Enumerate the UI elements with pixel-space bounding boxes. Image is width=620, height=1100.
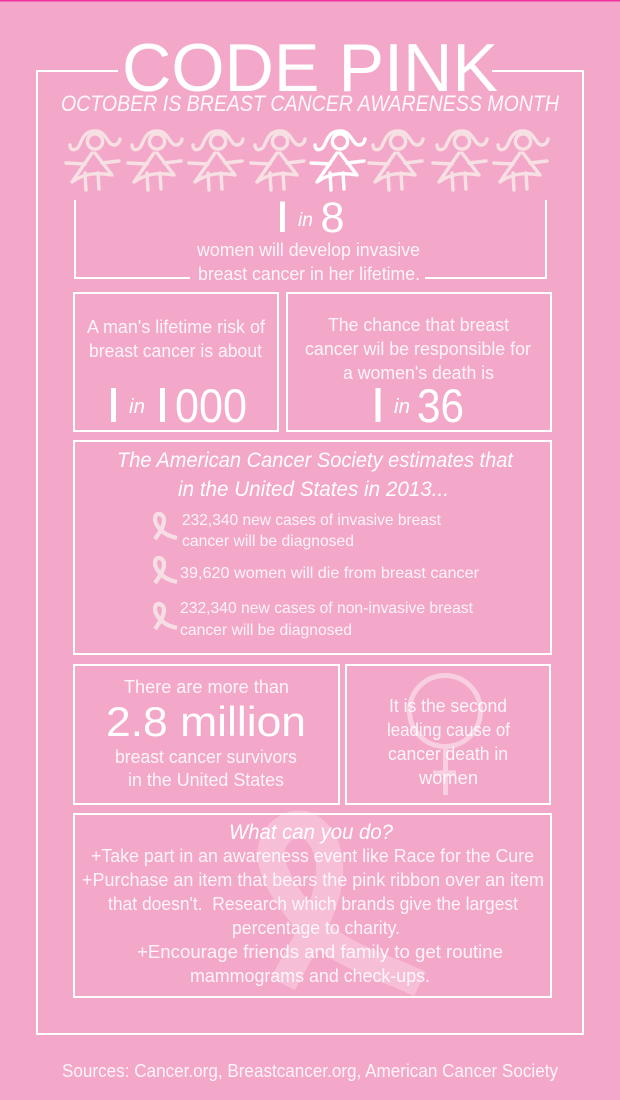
- bullet: deaths: 39,620 women will die from breast cancer: [180, 565, 480, 582]
- panel: man's risk: [74, 293, 278, 432]
- statistic: 1 in 8: [280, 194, 344, 242]
- bullet: non-invasive cases: [180, 600, 474, 639]
- statistic: 2.8 million: 2.8 million: [106, 698, 306, 745]
- statistic: 1 in 36: 1: [376, 379, 380, 432]
- text block: a women's death is: [343, 363, 494, 383]
- text block: There are more than: [124, 677, 289, 697]
- panel: survivors: [74, 665, 339, 804]
- statistic: 1 in 1000: [111, 379, 247, 432]
- panel: American Cancer Society estimates: [74, 441, 551, 654]
- text block: +Take part in an awareness event like Race for the Cure: [91, 846, 534, 866]
- title: CODE PINK: [122, 30, 498, 106]
- text block: percentage to charity.: [232, 918, 400, 938]
- text block: breast cancer is about: [89, 341, 262, 361]
- text block: [115, 747, 297, 790]
- icon: ribbon: [155, 558, 177, 583]
- text block: [387, 696, 511, 788]
- outer frame: [37, 71, 583, 1034]
- text block: leading cause of: [387, 720, 511, 740]
- statistic: 1 in 1000: 1: [160, 379, 165, 432]
- text block: cancer death in: [388, 744, 508, 764]
- sources: Sources: Cancer.org, Breastcancer.org, American Cancer Society: [62, 1061, 558, 1081]
- icon: ribbon: [155, 514, 177, 539]
- statistic: 1 in 8: in: [298, 210, 313, 231]
- text block: It is the second: [389, 696, 507, 716]
- heading: in the United States in 2013...: [178, 478, 449, 501]
- text block: The chance that breast: [328, 315, 509, 335]
- top accent line: [0, 0, 620, 2]
- text block: cancer wil be responsible for: [305, 339, 531, 359]
- statistic: 1 in 1000: 000: [175, 379, 247, 432]
- subtitle: OCTOBER IS BREAST CANCER AWARENESS MONTH: [61, 91, 559, 116]
- statistic: 1 in 36: in: [394, 396, 410, 418]
- bullet: invasive cases: cancer will be diagnosed: [182, 533, 354, 550]
- text block: breast cancer in her lifetime.: [198, 264, 420, 284]
- bullet: non-invasive cases: cancer will be diagnosed: [180, 622, 352, 639]
- bullet: invasive cases: [182, 512, 442, 550]
- heading: The American Cancer Society estimates that: [117, 449, 514, 472]
- text block: women will develop invasive: [196, 240, 420, 260]
- text block: breast cancer survivors: [115, 747, 297, 767]
- text block: [305, 315, 531, 383]
- text block: that doesn't. Research which brands give the largest: [108, 894, 518, 914]
- text block: in the United States: [128, 770, 284, 790]
- bullet: non-invasive cases: 232,340 new cases of non-invasive breast: [180, 600, 474, 617]
- statistic: 1 in 8: 8: [320, 194, 344, 242]
- panel: second leading cause: [346, 665, 550, 804]
- statistic: 1 in 36: [376, 379, 464, 432]
- statistic: 1 in 8: 1: [280, 194, 285, 242]
- text block: [87, 317, 266, 361]
- text block: [196, 240, 420, 284]
- row of eight girl icons, one highlighted: [66, 131, 548, 190]
- icon: female symbol: [410, 676, 480, 795]
- text block: +Purchase an item that bears the pink ribbon over an item: [82, 870, 544, 890]
- heading: What can you do?: [229, 821, 393, 844]
- panel: chance of death: [287, 293, 551, 432]
- bullet: invasive cases: 232,340 new cases of invasive breast: [182, 512, 442, 529]
- icon: ribbon: [155, 604, 177, 629]
- heading: [117, 449, 514, 501]
- panel: what can you do: [74, 814, 551, 997]
- icon: large ribbon watermark: [271, 824, 420, 984]
- text block: mammograms and check-ups.: [190, 966, 430, 986]
- text block: [82, 846, 544, 986]
- text block: women: [418, 768, 478, 788]
- panel: 1 in 8: [75, 194, 546, 284]
- text block: A man's lifetime risk of: [87, 317, 266, 337]
- statistic: 1 in 1000: 1: [111, 379, 116, 432]
- statistic: 1 in 36: 36: [417, 379, 464, 432]
- statistic: 1 in 1000: in: [129, 396, 145, 418]
- text block: +Encourage friends and family to get routine: [137, 942, 503, 962]
